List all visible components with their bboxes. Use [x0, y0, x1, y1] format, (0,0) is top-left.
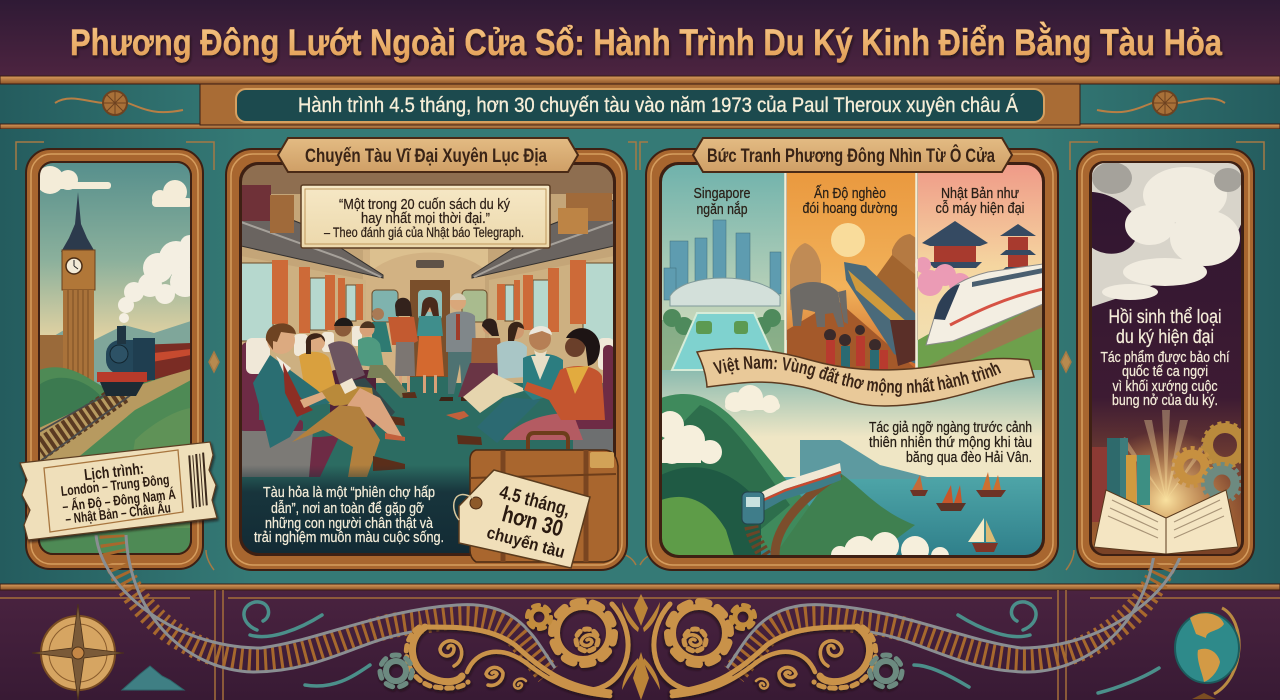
- text: revival: bung nở của du ký.: [1112, 392, 1218, 409]
- heading banner: continental train: Chuyến Tàu Vĩ Đại Xuyên Lục Địa: [305, 146, 547, 167]
- scroll gears and spirals left: [380, 602, 628, 696]
- man in grey suit: [439, 293, 476, 401]
- panel: train interior frame: [226, 138, 627, 570]
- heading banner: continental train: [278, 138, 578, 172]
- standing passengers: [372, 293, 476, 401]
- panel: revival frame: [1077, 149, 1254, 570]
- floor: [242, 383, 613, 514]
- panel: eastern views frame: [645, 137, 1059, 571]
- headrests: [246, 326, 614, 374]
- woman in orange jacket foreground: [503, 328, 605, 440]
- luggage tag: [454, 470, 590, 568]
- seated passengers right: [446, 318, 605, 445]
- body text: dẫn”, nơi an toàn để gặp gỡ: [271, 500, 424, 517]
- heading banner: eastern views: Bức Tranh Phương Đông Nhìn Từ Ô Cửa: [707, 145, 995, 167]
- man with dark suit: [328, 318, 405, 426]
- seats left: [241, 342, 376, 477]
- luggage tag: chuyến tàu: [485, 523, 567, 562]
- ground: [39, 365, 191, 555]
- column labels: Ấn Độ nghèo: [814, 185, 886, 202]
- ticket: itinerary: – Nhật Bản – Châu Âu: [64, 498, 172, 527]
- quote plaque: hay nhất mọi thời đại.”: [361, 210, 490, 227]
- luggage tag: hơn 30: [499, 500, 566, 542]
- scene: London departure: [36, 162, 200, 555]
- bottom text shade: [241, 465, 471, 555]
- header band: [0, 0, 1280, 77]
- ticket: itinerary: [20, 442, 217, 540]
- old man teal shirt: [457, 326, 563, 445]
- lower scene: Vietnam: [656, 340, 1043, 568]
- central spire: [622, 594, 660, 700]
- subtitle banner: [236, 89, 1044, 122]
- steam clouds: [1091, 162, 1242, 307]
- steam locomotive: [97, 326, 191, 396]
- column: India: [787, 164, 917, 370]
- ticket: itinerary: – Ấn Độ – Đông Nam Á: [61, 486, 177, 514]
- ribbon banner: Vietnam: Việt Nam: Vùng đất thơ mộng nhất hành trình: [712, 356, 1002, 397]
- subtitle banner: Hành trình 4.5 tháng, hơn 30 chuyến tàu vào năm 1973 của Paul Theroux xuyên châu Á: [298, 94, 1018, 117]
- ornament: left wheel: [55, 91, 183, 115]
- overhead suitcases: [241, 185, 612, 234]
- text: revival: quốc tế ca ngợi: [1122, 363, 1208, 380]
- woman in yellow blouse: [299, 333, 405, 441]
- text: revival: Hồi sinh thể loại: [1108, 307, 1222, 328]
- seats right: [494, 345, 613, 429]
- seat side: [241, 431, 313, 477]
- teal flourishes: [244, 602, 1159, 693]
- gears: [1173, 423, 1247, 502]
- text: Hai Van pass: thiên nhiên thứ mộng khi tàu: [869, 435, 1032, 451]
- rail track: [39, 392, 132, 462]
- seat side right: [573, 429, 614, 453]
- railway track right: [727, 535, 1186, 674]
- body text: Tàu hỏa là một “phiên chợ hấp: [263, 485, 435, 501]
- left wall windows and curtains: [242, 256, 363, 380]
- glow behind book: [1091, 430, 1241, 570]
- column: Singapore: [661, 164, 785, 370]
- body text: trải nghiệm muôn màu cuộc sống.: [254, 530, 444, 546]
- text: revival: vì khối xướng cuộc: [1112, 378, 1218, 395]
- steam smoke: [118, 235, 190, 323]
- quote plaque: “Một trong 20 cuốn sách du ký: [339, 196, 510, 213]
- hills: [56, 321, 190, 386]
- ticket: itinerary: London – Trung Đông: [60, 471, 170, 499]
- woman in orange jacket: [388, 298, 418, 392]
- column labels: cỗ máy hiện đại: [936, 200, 1024, 217]
- junk boats: [910, 472, 1006, 552]
- suitcase: [470, 433, 618, 562]
- crowd: [824, 325, 881, 351]
- man with green top: [358, 321, 417, 398]
- book stack: [1091, 438, 1150, 522]
- woman in teal and orange: [416, 297, 444, 393]
- luggage tag: 4.5 tháng,: [497, 482, 572, 521]
- text: revival: Tác phẩm được bảo chí: [1100, 349, 1230, 366]
- small gold gear: [531, 609, 547, 625]
- palace: [40, 335, 63, 370]
- train on pass: [742, 463, 841, 524]
- spirals: [440, 641, 462, 666]
- heading banner: eastern views: [693, 138, 1012, 172]
- quote plaque: – Theo đánh giá của Nhật báo Telegraph.: [324, 225, 524, 240]
- open book: [1086, 490, 1246, 560]
- right wall windows and curtains: [489, 256, 614, 390]
- body text: những con người chân thật và: [265, 516, 434, 532]
- luggage racks: [241, 200, 614, 278]
- text: Hai Van pass: Tác giả ngỡ ngàng trước cảnh: [869, 420, 1032, 436]
- green gear: [386, 661, 406, 681]
- ornament: right wheel: [1097, 91, 1225, 115]
- text: revival: [1100, 307, 1230, 409]
- Big Ben tower: [61, 192, 95, 390]
- cloud bottom: [831, 532, 949, 568]
- bottom ornamental band: [0, 535, 1280, 700]
- column labels: ngăn nắp: [696, 201, 748, 218]
- panel: left window frame: [26, 149, 203, 569]
- India train: [844, 262, 916, 366]
- column: Japan: [915, 164, 1043, 372]
- half gear scroll: [412, 627, 462, 682]
- woman in brown: [458, 318, 503, 397]
- big gear: [552, 602, 614, 664]
- teal main wall: [0, 129, 1280, 585]
- clouds: [36, 166, 192, 207]
- icon: compass: [32, 604, 124, 700]
- text: Hai Van pass: băng qua đèo Hải Vân.: [906, 450, 1032, 466]
- woman in light blue: [446, 322, 527, 420]
- text: Hai Van pass: [869, 420, 1032, 466]
- wall ornaments: [16, 142, 1264, 570]
- background passenger: [372, 308, 392, 352]
- seated passengers left: [253, 318, 417, 477]
- column labels: [694, 185, 1024, 218]
- scroll gears and spirals right: [654, 602, 902, 696]
- column labels: Nhật Bản như: [941, 185, 1019, 202]
- ribbon banner: Vietnam: [696, 348, 1035, 407]
- mountain icon: [122, 666, 184, 690]
- man in teal jacket: [253, 323, 405, 477]
- subtitle band: [0, 76, 1280, 129]
- column labels: Singapore: [694, 185, 750, 202]
- body text: [254, 485, 444, 546]
- icon: globe: [1175, 608, 1239, 699]
- scene: train carriage: [241, 164, 614, 555]
- column labels: đói hoang dường: [802, 200, 898, 217]
- text: revival: du ký hiện đại: [1116, 327, 1214, 348]
- end wall and door: [363, 250, 485, 390]
- ticket: itinerary: Lịch trình:: [83, 461, 145, 484]
- quote plaque: [301, 185, 550, 248]
- elephant: [790, 282, 848, 327]
- railway track left: [96, 535, 555, 674]
